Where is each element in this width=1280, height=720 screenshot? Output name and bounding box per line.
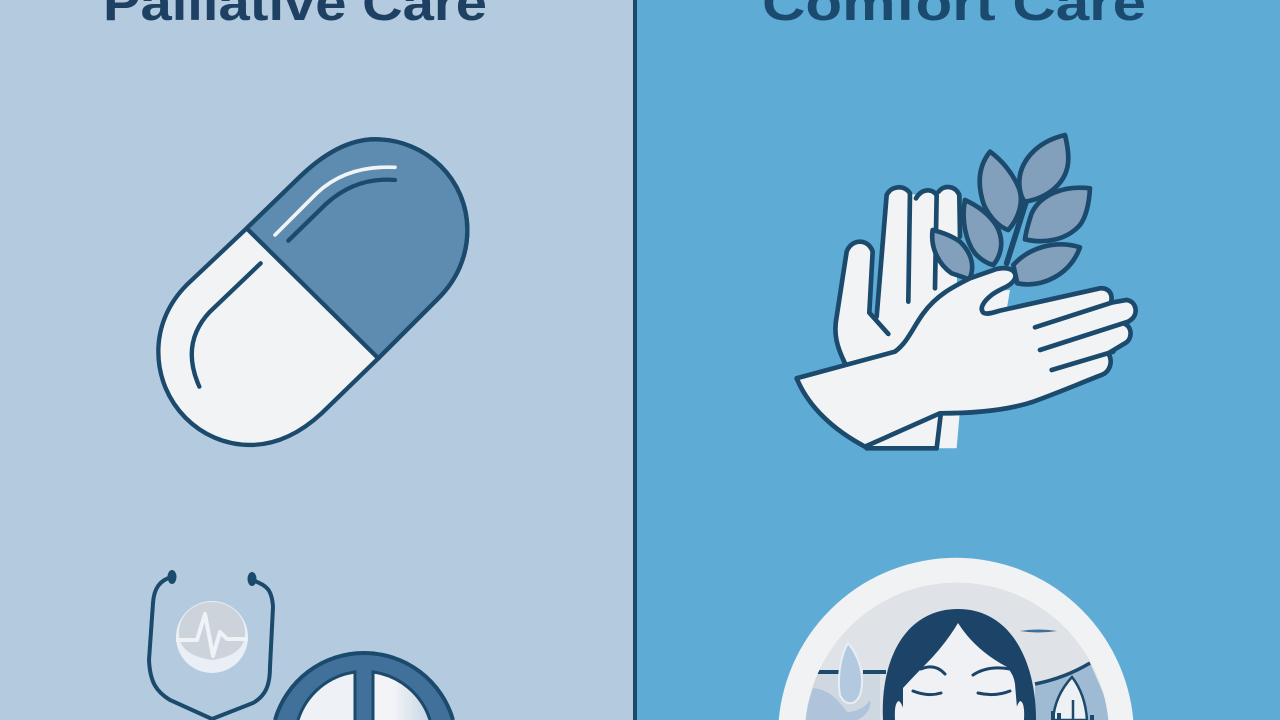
hair <box>883 609 1036 720</box>
plant leaves <box>932 135 1090 284</box>
landscape scenery <box>800 630 1115 720</box>
back hand <box>835 187 1010 448</box>
icon: hands holding a plant <box>797 135 1136 448</box>
ear left <box>895 701 905 720</box>
center divider <box>633 0 637 720</box>
icon: medicine dial <box>275 653 453 720</box>
face <box>903 623 1018 720</box>
panel: palliative care background <box>0 0 634 720</box>
front hand <box>797 268 1136 447</box>
heartbeat chest piece <box>176 601 248 673</box>
ear right <box>1014 701 1024 720</box>
panel: comfort care background <box>634 0 1280 720</box>
eyebrows <box>921 667 1010 675</box>
icon: calm woman portrait <box>779 558 1133 720</box>
icon: medicine capsule <box>158 139 467 445</box>
closed eyes <box>913 691 1010 695</box>
icon: stethoscope <box>149 570 273 719</box>
